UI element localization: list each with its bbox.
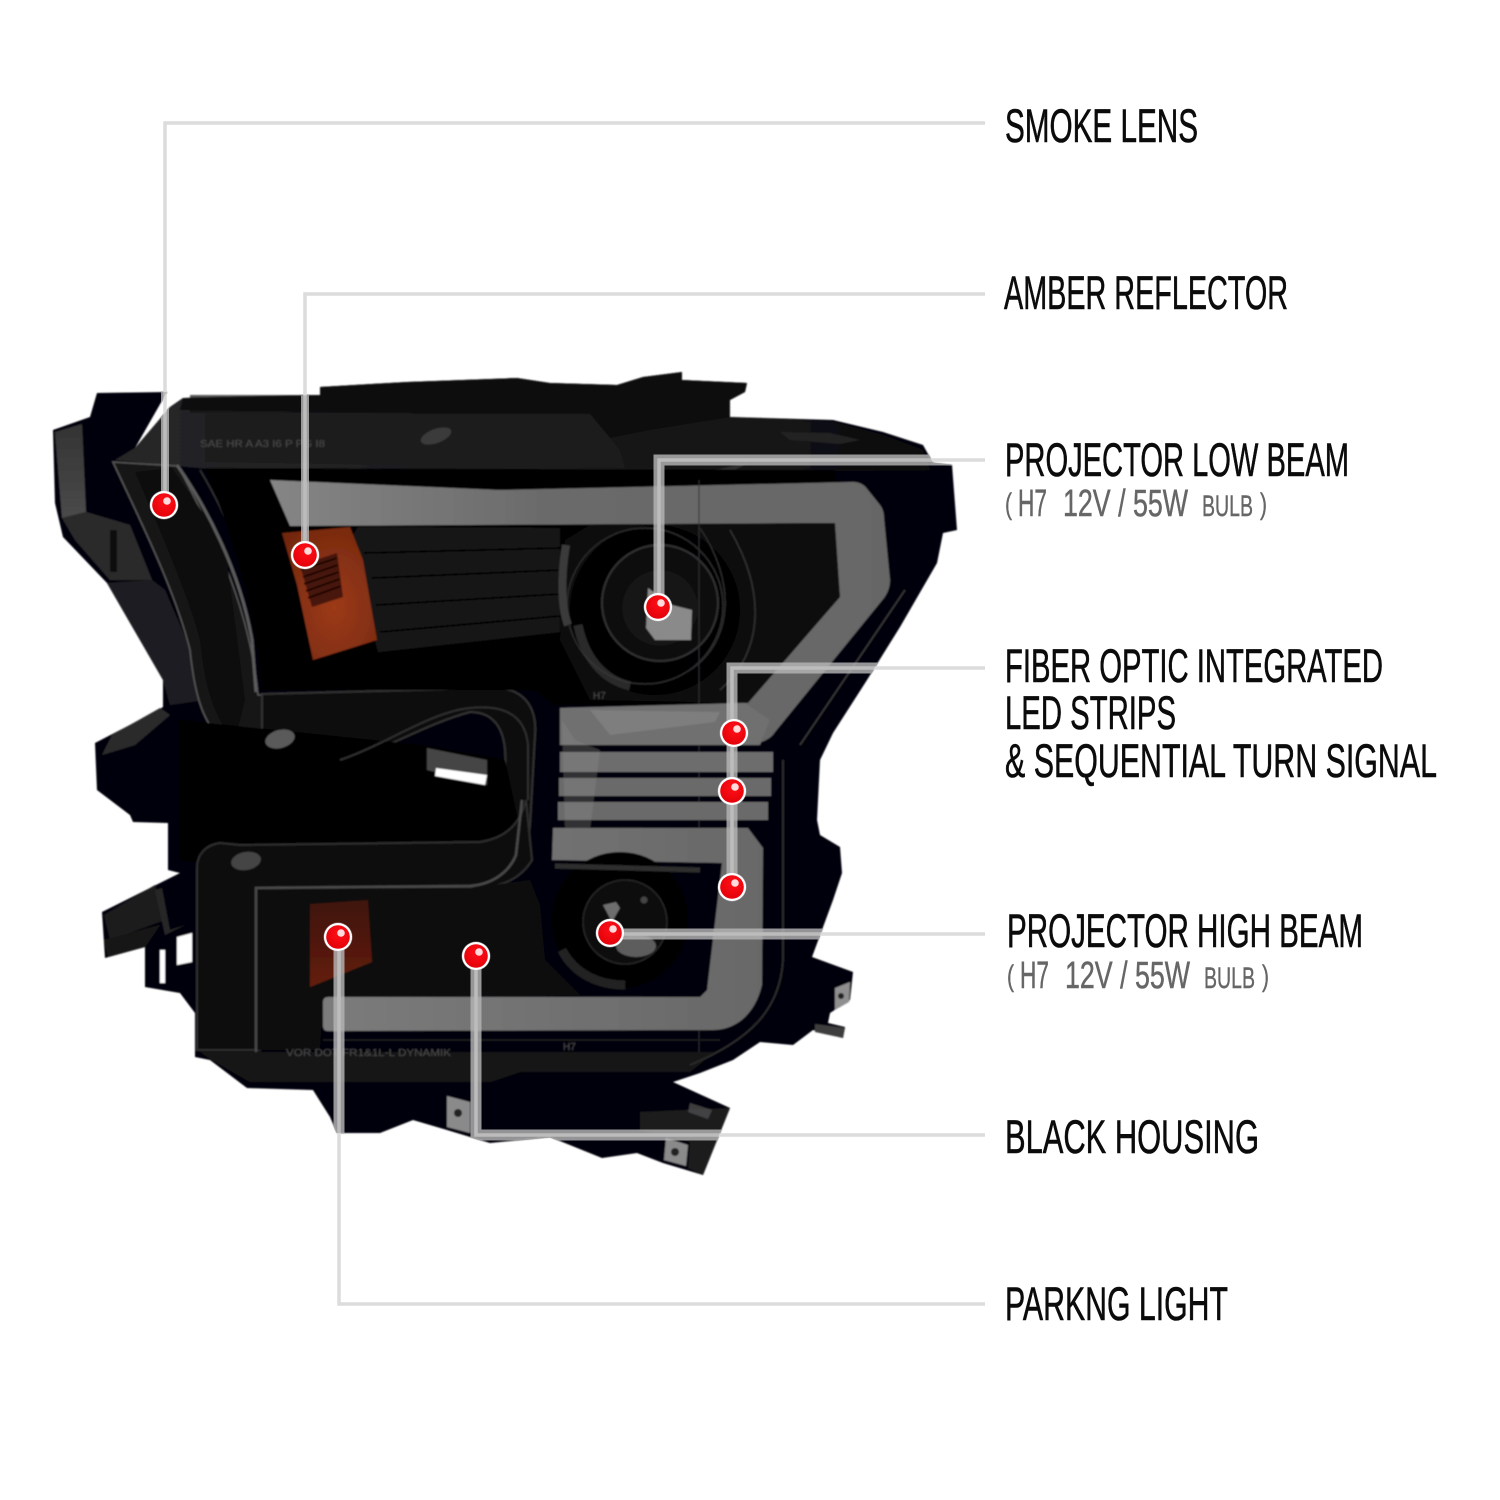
dot: smoke lens <box>150 490 178 520</box>
lower band <box>200 1052 715 1082</box>
lower left bracket <box>104 885 185 957</box>
label: projector low beam: ) <box>1260 488 1267 521</box>
label: projector high beam: 12V / 55W <box>1065 955 1190 997</box>
lens pin top <box>419 424 453 448</box>
S trim outline <box>240 688 535 886</box>
center S body <box>180 720 520 870</box>
lower amber <box>310 900 372 987</box>
label: projector low beam: ( <box>1005 488 1012 521</box>
label: projector low beam: H7 <box>1018 483 1047 525</box>
top highlights <box>660 462 750 485</box>
lens top markings: SAE HR A A3 I6 P PG I8 <box>200 439 326 450</box>
inner dark cavity <box>205 468 840 705</box>
label: projector low beam: 12V / 55W <box>1063 483 1188 525</box>
dot: amber reflector <box>290 540 320 570</box>
lower left lens <box>197 800 532 1050</box>
bracket holes <box>160 933 192 983</box>
dot: high beam <box>596 918 624 948</box>
dot: low beam <box>644 592 672 622</box>
chrome tab <box>427 748 487 785</box>
upper lens band <box>115 398 930 476</box>
label: projector low beam: BULB <box>1202 490 1253 523</box>
lower pin <box>230 850 262 872</box>
label: smoke lens: SMOKE LENS <box>1005 99 1198 152</box>
marker dots <box>150 490 748 970</box>
dot: LED strip 1 <box>720 718 748 748</box>
H7 marks: H7 <box>593 691 606 702</box>
black trim sweep <box>135 468 245 740</box>
label: projector high beam <box>1007 904 1363 997</box>
turn signal strips <box>558 703 773 830</box>
top ledge <box>180 372 747 440</box>
left lens edge <box>113 462 535 763</box>
label: projector high beam: ( <box>1007 960 1014 993</box>
trim edge highlight <box>177 465 256 692</box>
bottom tabs <box>447 1096 730 1175</box>
lens marking text: VOR DOT FR1&1L-L DYNAMIK <box>286 1048 451 1059</box>
label: parking light: PARKNG LIGHT <box>1005 1277 1228 1330</box>
lower right edge <box>690 760 783 1065</box>
headlight illustration <box>53 372 957 1175</box>
label: projector high beam: H7 <box>1020 955 1049 997</box>
dot: parking light <box>324 922 352 952</box>
callout leader lines <box>165 123 985 1304</box>
label: projector low beam <box>1005 433 1349 525</box>
dot: black housing <box>462 942 490 970</box>
label: projector high beam: ) <box>1262 960 1269 993</box>
right side connector <box>815 982 850 1038</box>
lens pins <box>263 726 297 752</box>
label: fiber optic LED strips <box>1005 639 1437 787</box>
dot: LED strip 3 <box>718 872 746 902</box>
H7 lower mark: H7 <box>563 1042 576 1053</box>
reflector ribs <box>350 527 560 652</box>
left mounting bracket <box>55 424 205 755</box>
housing silhouette <box>53 372 957 1175</box>
translucent inner lines <box>161 392 952 1140</box>
high beam projector <box>540 852 720 997</box>
dot: LED strip 2 <box>718 776 746 806</box>
vertical mould line <box>698 480 700 1060</box>
low beam projector <box>560 523 840 703</box>
thin outer lines <box>165 123 985 1304</box>
amber reflector <box>282 527 377 660</box>
label: projector high beam: BULB <box>1204 962 1255 995</box>
fiber optic upper LED strip <box>270 480 890 745</box>
label: fiber optic LED strips: LED STRIPS <box>1005 686 1176 739</box>
fiber optic lower LED strip <box>323 828 763 1031</box>
label: black housing: BLACK HOUSING <box>1005 1110 1259 1163</box>
label: amber reflector: AMBER REFLECTOR <box>1004 266 1288 319</box>
